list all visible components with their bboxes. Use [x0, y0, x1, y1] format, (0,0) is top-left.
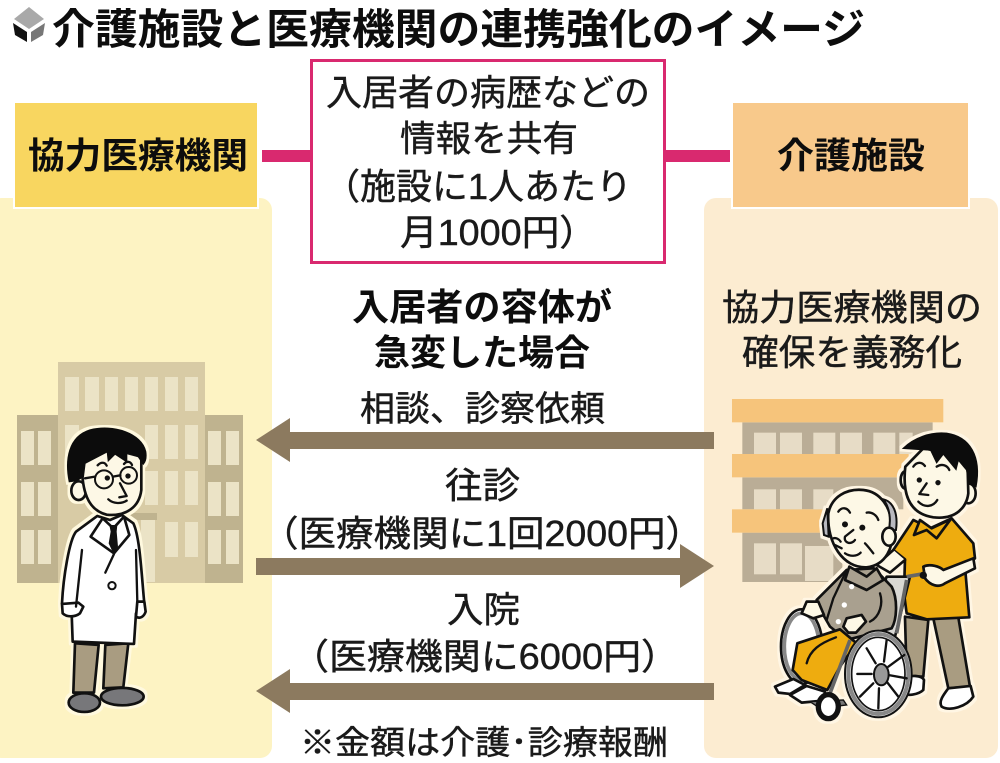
- panel: medical institution: [0, 198, 272, 758]
- connector lines: [262, 150, 730, 162]
- label: consultation: 相談、診察依頼: [360, 390, 605, 429]
- title: 介護施設と医療機関の連携強化のイメージ: [52, 6, 865, 53]
- callout: information sharing: 月1000円）: [400, 212, 597, 253]
- callout: information sharing: 入居者の病歴などの: [326, 72, 650, 113]
- label: home visit: （医療機関に1回2000円）: [261, 513, 703, 554]
- heading: emergency: 急変した場合: [374, 332, 590, 373]
- header: care facility: [731, 101, 970, 209]
- label: hospitalization: [291, 589, 679, 677]
- header: medical institution: [13, 101, 259, 209]
- heading: emergency: [352, 287, 612, 373]
- arrow: to medical institution: [256, 418, 714, 462]
- callout: information sharing: （施設に1人あたり: [324, 166, 632, 207]
- hospital building: [17, 362, 243, 583]
- note: ※金額は介護･診療報酬: [300, 724, 668, 761]
- label: hospitalization: （医療機関に6000円）: [291, 636, 679, 677]
- care facility building: [732, 399, 943, 582]
- panel: care facility: [704, 198, 998, 758]
- header: care facility: 介護施設: [777, 135, 925, 176]
- text: obligation: [722, 287, 982, 373]
- label: home visit: [261, 465, 703, 554]
- heading: emergency: 入居者の容体が: [352, 287, 612, 328]
- arrow: to medical institution 2: [256, 669, 714, 713]
- text: obligation: 確保を義務化: [742, 332, 962, 373]
- callout: information sharing: [312, 60, 664, 262]
- figure: doctor: [62, 428, 146, 712]
- text: obligation: 協力医療機関の: [722, 287, 982, 328]
- label: home visit: 往診: [445, 465, 520, 506]
- callout: information sharing: 情報を共有: [400, 118, 578, 159]
- label: hospitalization: 入院: [447, 589, 520, 630]
- header: medical institution: 協力医療機関: [28, 135, 248, 176]
- icon: cube: [13, 7, 45, 42]
- figure: caregiver and resident in wheelchair: [775, 433, 977, 719]
- arrow: to care facility: [256, 544, 714, 588]
